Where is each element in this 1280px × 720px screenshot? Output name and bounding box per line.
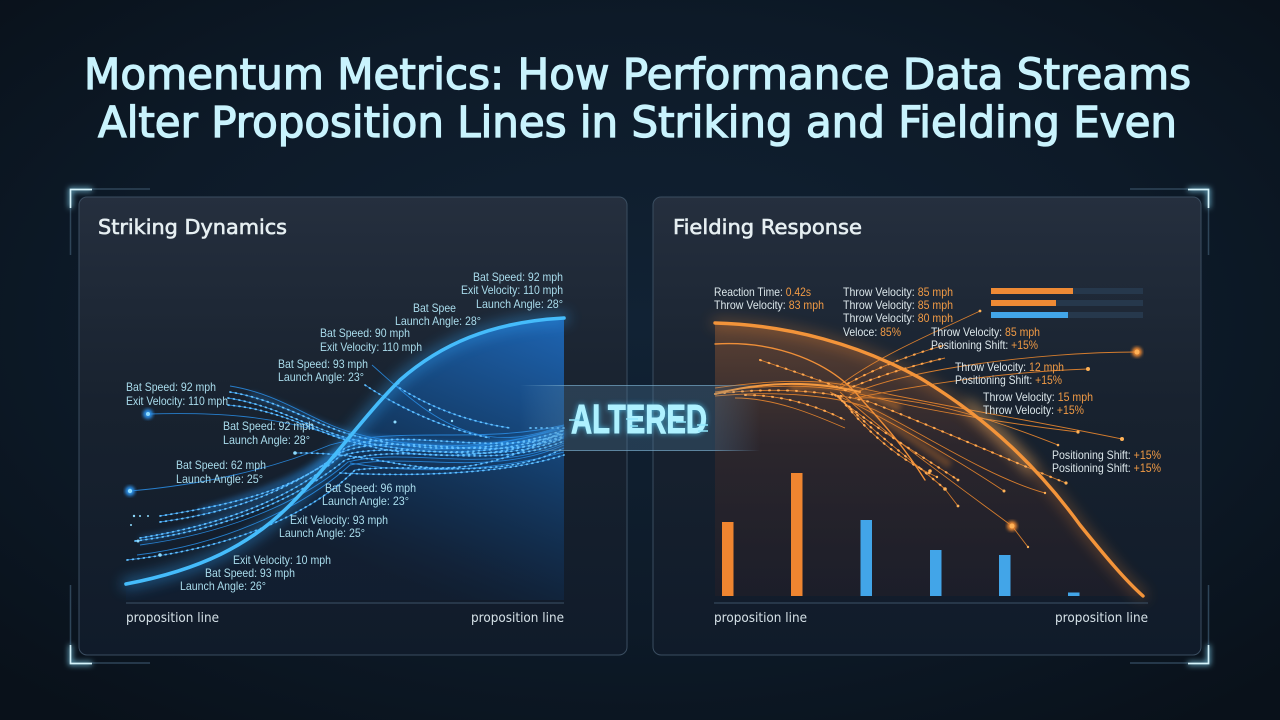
area under striking curve — [126, 318, 564, 600]
heading: striking dynamics: Striking Dynamics — [98, 215, 287, 239]
metric labels: striking: Exit Velocity: 93 mph — [290, 513, 388, 527]
metric labels: fielding: Veloce: 85% — [843, 325, 901, 339]
metric labels: striking: Bat Speed: 93 mph — [278, 357, 368, 371]
metric labels: striking: Launch Angle: 26° — [180, 579, 266, 593]
metric labels: striking: Launch Angle: 23° — [278, 370, 364, 384]
metric labels: striking: Bat Speed: 92 mph — [473, 270, 563, 284]
metric labels: striking: Launch Angle: 25° — [176, 472, 263, 486]
corner brackets — [70, 189, 1208, 664]
metric labels: striking: Exit Velocity: 110 mph — [320, 340, 422, 354]
metric labels: fielding: Positioning Shift: +15% — [955, 373, 1062, 387]
title: Alter Proposition Lines in Striking and Fielding Even — [98, 98, 1177, 148]
metric labels: fielding: Throw Velocity: 12 mph — [955, 360, 1064, 374]
metric labels: fielding: Positioning Shift: +15% — [1052, 448, 1161, 462]
stream end points — [125, 382, 453, 557]
axis: fielding proposition line: proposition line — [714, 610, 807, 626]
metric labels: fielding — [714, 285, 1161, 475]
metric labels: fielding: Positioning Shift: +15% — [931, 338, 1038, 352]
metric labels: fielding: Throw Velocity: 85 mph — [843, 285, 953, 299]
metric labels: striking: Bat Spee — [413, 301, 456, 315]
altered label: ALTERED — [571, 396, 707, 442]
altered band — [520, 385, 760, 451]
metric labels: striking: Launch Angle: 28° — [395, 314, 481, 328]
axis: fielding proposition line: proposition line — [1055, 610, 1148, 626]
title: Momentum Metrics: How Performance Data Streams — [84, 50, 1191, 100]
fielding curve — [715, 323, 1143, 596]
stream end points — [928, 310, 1142, 548]
progress bars — [991, 288, 1143, 318]
data streams: fielding — [715, 311, 1137, 547]
axis: striking proposition line: proposition line — [126, 610, 219, 626]
metric labels: striking: Bat Speed: 96 mph — [325, 481, 416, 495]
metric labels: fielding: Reaction Time: 0.42s — [714, 285, 811, 299]
metric labels: striking: Launch Angle: 23° — [322, 494, 409, 508]
axis: striking proposition line — [126, 603, 564, 626]
metric labels: fielding: Throw Velocity: 85 mph — [931, 325, 1040, 339]
metric labels: striking: Bat Speed: 90 mph — [320, 326, 410, 340]
panel: striking dynamics — [79, 197, 627, 655]
metric labels: striking: Bat Speed: 62 mph — [176, 458, 266, 472]
data streams: striking — [127, 365, 564, 560]
panel: fielding response — [653, 197, 1201, 655]
metric labels: striking: Launch Angle: 28° — [223, 433, 310, 447]
area under fielding curve — [715, 323, 1143, 596]
metric labels: fielding: Throw Velocity: +15% — [983, 403, 1084, 417]
metric labels: striking — [126, 270, 563, 593]
heading: fielding response: Fielding Response — [673, 215, 862, 239]
axis: fielding proposition line — [714, 603, 1148, 626]
metric labels: striking: Launch Angle: 25° — [279, 526, 365, 540]
metric labels: striking: Bat Speed: 92 mph — [126, 380, 216, 394]
metric labels: fielding: Positioning Shift: +15% — [1052, 461, 1161, 475]
metric labels: striking: Bat Speed: 93 mph — [205, 566, 295, 580]
metric labels: striking: Bat Speed: 92 mph — [223, 419, 314, 433]
metric labels: striking: Exit Velocity: 10 mph — [233, 553, 331, 567]
bar chart — [722, 473, 1080, 596]
altered label: ALTERED — [571, 396, 707, 442]
axis: striking proposition line: proposition line — [471, 610, 564, 626]
metric labels: fielding: Throw Velocity: 83 mph — [714, 298, 824, 312]
title — [84, 50, 1191, 148]
striking curve — [126, 318, 564, 584]
metric labels: striking: Exit Velocity: 110 mph — [461, 283, 563, 297]
metric labels: fielding: Throw Velocity: 15 mph — [983, 390, 1093, 404]
metric labels: fielding: Throw Velocity: 80 mph — [843, 311, 953, 325]
metric labels: striking: Launch Angle: 28° — [476, 297, 563, 311]
metric labels: striking: Exit Velocity: 110 mph — [126, 394, 228, 408]
metric labels: fielding: Throw Velocity: 85 mph — [843, 298, 953, 312]
